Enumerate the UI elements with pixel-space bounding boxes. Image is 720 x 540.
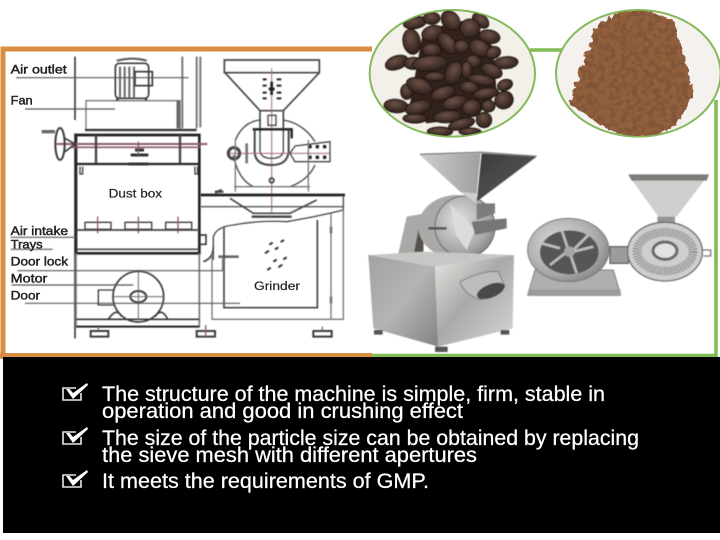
- dust collector drawing: [42, 57, 332, 338]
- panel: green photo frame: [372, 50, 716, 356]
- panel: orange diagram frame: [0, 49, 372, 359]
- part labels: Motor: [11, 272, 47, 286]
- panel: product photos: [368, 7, 720, 352]
- part labels: Door lock: [11, 255, 69, 269]
- part labels: Trays: [11, 237, 43, 251]
- photo: assembled grinder machine: [368, 152, 537, 352]
- part labels: Door: [11, 289, 40, 303]
- leader lines: [11, 78, 240, 303]
- photo: cocoa beans: [370, 7, 535, 137]
- grinder drawing: [201, 60, 345, 319]
- feature 1 text: [102, 383, 605, 423]
- photo: opened grinder machine: [528, 174, 711, 296]
- feature 1 text: The structure of the machine is simple, firm, stable in: [102, 383, 605, 406]
- part labels: Fan: [11, 94, 33, 108]
- photo: cocoa powder: [556, 10, 720, 137]
- panel: grinder structure diagram: [11, 57, 345, 338]
- feature 3 text: It meets the requirements of GMP.: [102, 470, 429, 493]
- panel: black feature list: [3, 357, 720, 533]
- icon: checkbox 1: [63, 383, 88, 400]
- feature 1 text: operation and good in crushing effect: [102, 400, 463, 423]
- icon: checkbox 3: [63, 470, 88, 487]
- part labels: Air intake: [11, 224, 68, 238]
- part labels: Air outlet: [11, 63, 67, 77]
- part labels: [11, 63, 300, 303]
- feature 2 text: The size of the particle size can be obtained by replacing: [102, 427, 639, 450]
- part labels: Grinder: [254, 279, 300, 293]
- feature 2 text: [102, 427, 639, 467]
- feature 2 text: the sieve mesh with different apertures: [102, 444, 477, 467]
- part labels: Dust box: [109, 187, 163, 201]
- icon: checkbox 2: [63, 427, 88, 444]
